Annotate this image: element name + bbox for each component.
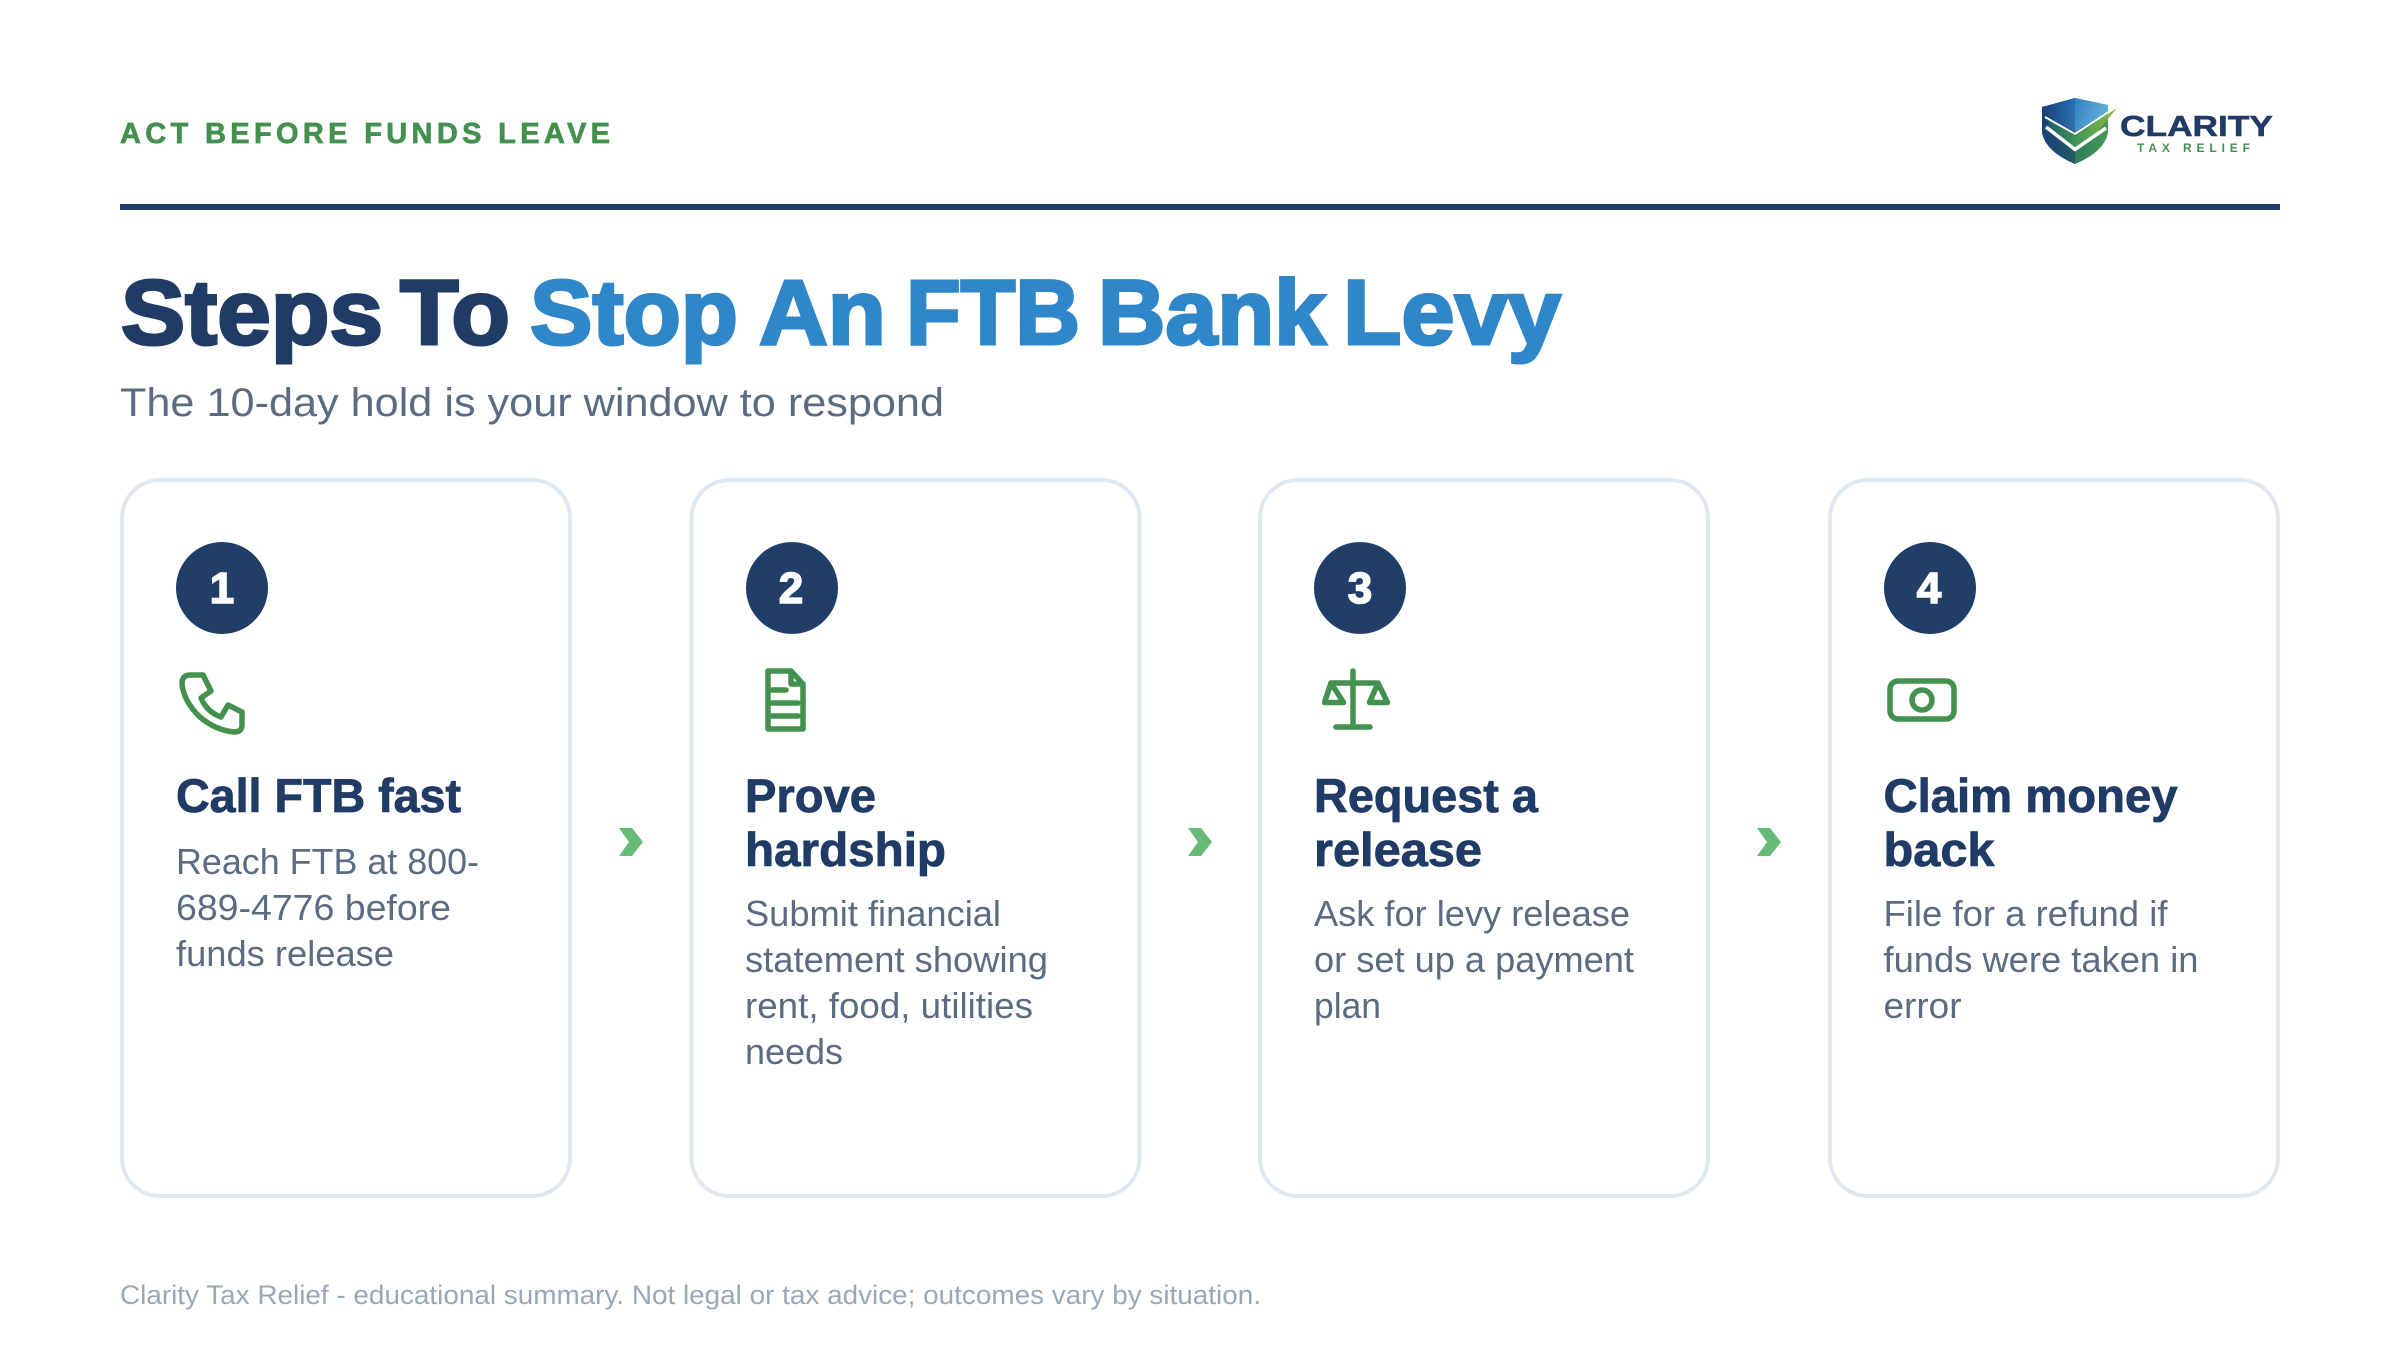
heading: request a release: release bbox=[1314, 823, 1482, 876]
text: step 4 description bbox=[1884, 893, 2198, 1026]
footer disclaimer: Clarity Tax Relief - educational summary. Not legal or tax advice; outcomes vary by situation. bbox=[120, 1280, 1261, 1310]
icon: phone bbox=[182, 675, 242, 732]
heading: claim money back: Claim money bbox=[1884, 769, 2178, 822]
icon: shield with check bbox=[2042, 98, 2117, 164]
panel: step 4 claim money back bbox=[1830, 480, 2278, 1196]
panel: step 2 prove hardship bbox=[692, 480, 1140, 1196]
text: step 3 description bbox=[1314, 893, 1634, 1026]
title: FTB bbox=[906, 262, 1080, 364]
title: An bbox=[759, 262, 886, 364]
text: step 3 description: plan bbox=[1314, 985, 1381, 1026]
heading: prove hardship: Prove bbox=[745, 769, 876, 822]
heading: request a release bbox=[1314, 769, 1539, 876]
text: step 1 description: Reach FTB at 800- bbox=[176, 841, 479, 882]
title: To bbox=[400, 262, 510, 364]
text: step 2 description: needs bbox=[745, 1031, 843, 1072]
logo: Clarity Tax Relief bbox=[2042, 98, 2273, 164]
arrow 1 bbox=[619, 828, 643, 856]
text: step 1 description: 689-4776 before bbox=[176, 887, 451, 928]
text: step 2 description: rent, food, utilities bbox=[745, 985, 1033, 1026]
text: step 3 description: Ask for levy release bbox=[1314, 893, 1630, 934]
text: step 4 description: funds were taken in bbox=[1884, 939, 2198, 980]
icon: balance scale bbox=[1324, 671, 1388, 727]
icon: document bbox=[768, 671, 803, 729]
text: step 2 description: Submit financial bbox=[745, 893, 1001, 934]
panel: step 1 call FTB bbox=[122, 480, 570, 1196]
step number 2: 2 bbox=[779, 564, 803, 613]
arrow 2 bbox=[1188, 828, 1212, 856]
step number 4: 4 bbox=[1917, 564, 1942, 613]
text: step 1 description bbox=[176, 841, 479, 974]
heading: claim money back: back bbox=[1884, 823, 1995, 876]
heading: prove hardship bbox=[745, 769, 946, 876]
panel: step 3 request a release bbox=[1260, 480, 1708, 1196]
title: Levy bbox=[1343, 262, 1561, 364]
text: step 4 description: File for a refund if bbox=[1884, 893, 2169, 934]
arrow 3 bbox=[1757, 828, 1781, 856]
text: step 2 description: statement showing bbox=[745, 939, 1048, 980]
step number 1 bbox=[176, 542, 268, 634]
step number 3: 3 bbox=[1348, 564, 1372, 613]
heading: call FTB fast: Call FTB fast bbox=[176, 769, 461, 822]
step number 3 bbox=[1314, 542, 1406, 634]
icon: banknote bbox=[1890, 681, 1954, 719]
heading: prove hardship: hardship bbox=[745, 823, 946, 876]
eyebrow label: ACT BEFORE FUNDS LEAVE bbox=[120, 118, 610, 150]
title: Steps bbox=[121, 262, 383, 364]
step number 4 bbox=[1884, 542, 1976, 634]
title: Bank bbox=[1098, 262, 1327, 364]
step number 2 bbox=[746, 542, 838, 634]
subtitle: The 10-day hold is your window to respond bbox=[120, 381, 944, 425]
heading: request a release: Request a bbox=[1314, 769, 1539, 822]
text: step 3 description: or set up a payment bbox=[1314, 939, 1634, 980]
logo wordmark: CLARITY bbox=[2120, 111, 2273, 143]
text: step 2 description bbox=[745, 893, 1048, 1072]
step number 1: 1 bbox=[210, 564, 234, 613]
heading: claim money back bbox=[1884, 769, 2178, 876]
logo tagline: TAX RELIEF bbox=[2137, 141, 2250, 155]
text: step 1 description: funds release bbox=[176, 933, 394, 974]
text: step 4 description: error bbox=[1884, 985, 1962, 1026]
title: Stop bbox=[530, 262, 738, 364]
